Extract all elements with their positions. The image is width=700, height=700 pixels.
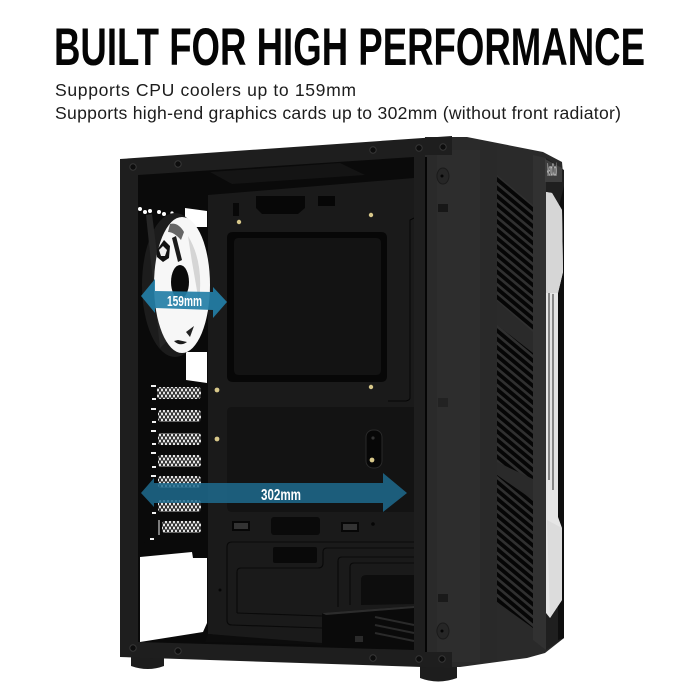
arrow: 302mm graphics card clearance bbox=[141, 473, 407, 512]
frame screws bbox=[130, 144, 446, 662]
white front light strip bbox=[546, 192, 563, 618]
power supply bay bbox=[322, 606, 414, 645]
lower tray plate bbox=[227, 407, 414, 512]
brass standoffs bbox=[215, 213, 373, 441]
arrow: 159mm cooler clearance bbox=[141, 279, 227, 318]
lower bay outlines bbox=[227, 542, 414, 628]
front vents bbox=[497, 175, 533, 628]
arrow: 302mm graphics card clearance: 302mm bbox=[261, 487, 301, 504]
top mesh bbox=[210, 163, 365, 184]
case frame bbox=[120, 136, 452, 668]
shroud opening bbox=[273, 547, 414, 605]
interior back panel bbox=[138, 157, 414, 650]
computer case bbox=[120, 136, 564, 682]
motherboard tray bbox=[208, 178, 414, 645]
case side and front panel bbox=[425, 137, 564, 667]
white lower opening bbox=[140, 552, 207, 642]
text block: specifications bbox=[55, 80, 621, 123]
text block: specifications: Supports CPU coolers up to 159mm bbox=[55, 80, 356, 100]
arrow: 159mm cooler clearance: 159mm bbox=[167, 293, 202, 310]
CPU cutout recess bbox=[227, 232, 387, 382]
tray bottom mesh bbox=[205, 634, 322, 645]
cable holes bbox=[218, 517, 375, 592]
text: AeroCool bbox=[547, 160, 557, 180]
tray top details bbox=[233, 196, 335, 216]
feet bbox=[131, 655, 457, 682]
text block: specifications: Supports high-end graphics cards up to 302mm (without front radiator) bbox=[55, 103, 621, 123]
right frame post bbox=[414, 157, 427, 652]
white fan opening bbox=[138, 207, 207, 383]
rear fan bbox=[142, 213, 210, 357]
PCI expansion slots bbox=[140, 385, 207, 543]
